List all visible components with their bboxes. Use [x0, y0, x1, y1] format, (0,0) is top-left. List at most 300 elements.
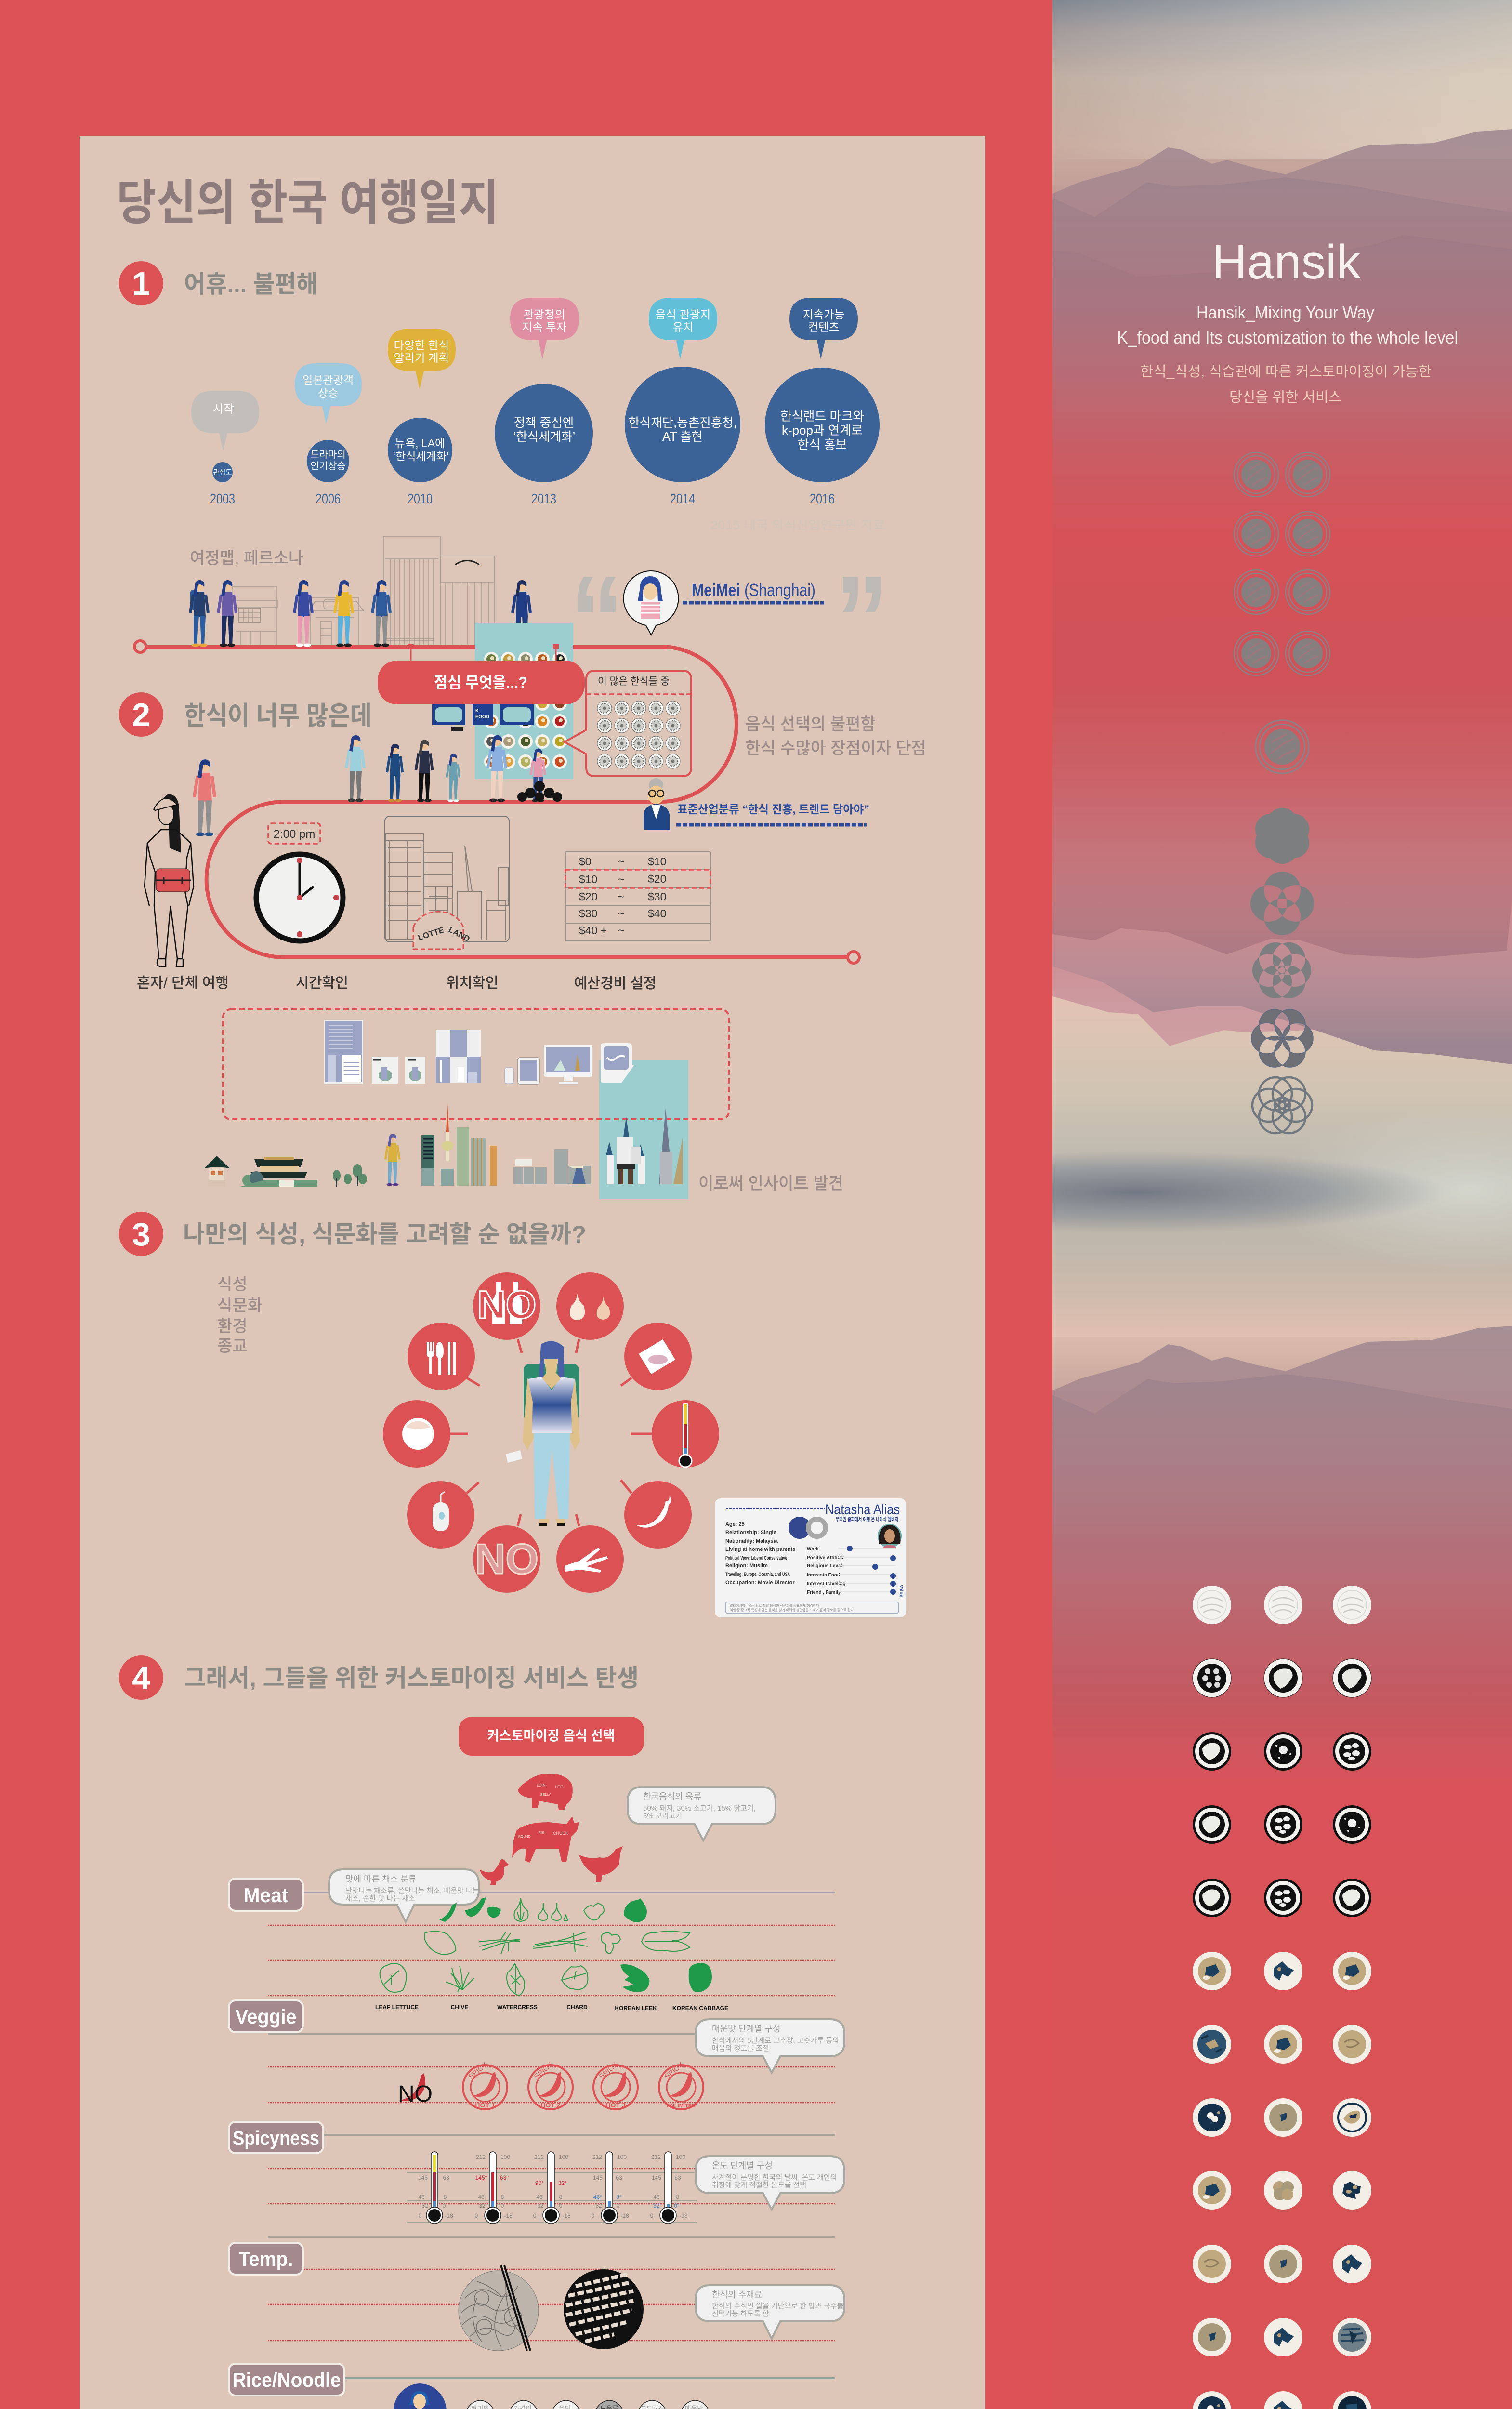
- panel: right mountain background: [1052, 0, 1512, 1764]
- thermometer 4: 100: [617, 2154, 627, 2160]
- speech bubble: sustainable content: [789, 298, 858, 359]
- thermometer 4: [592, 2152, 629, 2224]
- list: food habits factors: 종교: [217, 1337, 248, 1355]
- callout: Korean meat share: 50% 돼지, 30% 소고기, 15% 닭고기,: [643, 1804, 756, 1813]
- persona card: Natasha Alias: Nationality: Malaysia: [725, 1538, 778, 1544]
- stamp: hot 1: [463, 2061, 507, 2109]
- vegetable names: KOREAN CABBAGE: [672, 2005, 728, 2012]
- persona card: Natasha Alias: Natasha Alias: [825, 1502, 900, 1518]
- persona card: Natasha Alias: 여행 중 종교적 특성에 맞는 음식을 찾기 어려워 불편함을 느끼며 음식 정보를 필요로 한다: [730, 1608, 854, 1612]
- food kiosk screens: K: [475, 708, 479, 714]
- document 1: [324, 1020, 363, 1084]
- budget price table: $10: [648, 855, 666, 868]
- pattern: six petal flower: [1252, 942, 1311, 998]
- food dish grid on teal wall: [484, 652, 567, 769]
- list: food habits factors: [217, 1275, 263, 1355]
- persona sliders: [807, 1546, 904, 1598]
- thermometer 2: 0: [475, 2212, 478, 2219]
- circle labels: 한식재단,농촌진흥청,: [628, 416, 737, 430]
- year labels: [210, 491, 835, 507]
- plate grid: customizable dishes: [1193, 1586, 1371, 2409]
- option pins: [465, 2400, 710, 2409]
- connectors to lunch question: [408, 645, 558, 648]
- step labels: 시간확인: [296, 975, 348, 991]
- budget price table: ~: [618, 907, 624, 920]
- callout: main ingredients: 선택가능 하도록 함: [712, 2310, 769, 2318]
- circle labels: 인기상승: [310, 461, 346, 472]
- dashed row lines: spicy rows: [268, 2067, 835, 2103]
- lunch question pill: [378, 661, 585, 704]
- persona card: Natasha Alias: Age: 25: [725, 1522, 745, 1527]
- circle labels: 정책 중심엔: [514, 416, 574, 430]
- bubble text: start: 시작: [213, 403, 234, 416]
- clock: 2:00 pm: [256, 823, 343, 941]
- callout: vegetables by taste: 채소, 순한 맛 나는 채소: [345, 1894, 415, 1903]
- thermometer 2: 0: [501, 2202, 504, 2209]
- thermometer 5: 100: [676, 2154, 685, 2160]
- thermometer 3: 46: [536, 2194, 543, 2200]
- thermometer 2: 100: [500, 2154, 510, 2160]
- thermometer 5: 0: [650, 2212, 654, 2219]
- stamp: unlimited: [659, 2061, 703, 2109]
- thermometer 4: 32: [595, 2202, 602, 2209]
- bubble text: food attractions: 유치: [672, 321, 694, 333]
- speech bubble: plans: [388, 329, 456, 389]
- circle labels: ‘한식세계화’: [513, 430, 575, 444]
- icon: no alcohol: [473, 1272, 540, 1340]
- section 3 heading: [119, 1212, 586, 1256]
- traveller with bag: [385, 1134, 399, 1186]
- thermometer 4: 0: [592, 2212, 595, 2219]
- circle labels: 뉴욕, LA에: [395, 437, 445, 450]
- circle labels: k-pop과 연계로: [782, 423, 863, 437]
- section 4 heading: [119, 1655, 639, 1700]
- right panel subtitle: [1117, 303, 1458, 347]
- stamp: hot 1: SPICY: [467, 2061, 489, 2081]
- callout: temperature levels: [696, 2156, 844, 2210]
- year labels: 2013: [531, 491, 556, 507]
- persona photo: [878, 1524, 902, 1548]
- budget price table: $20: [579, 890, 597, 903]
- budget price table: ~: [618, 890, 624, 903]
- section 4 heading: 그래서, 그들을 위한 커스토마이징 서비스 탄생: [184, 1665, 639, 1692]
- bubble text: food attractions: 음식 관광지: [656, 308, 710, 321]
- circle labels: 드라마의: [310, 449, 346, 460]
- insight text: 이로써 인사이트 발견: [698, 1174, 843, 1193]
- icon: no meat: NO: [475, 1535, 539, 1583]
- callout: temperature levels: 취향에 맞게 적절한 온도를 선택: [712, 2181, 806, 2189]
- figure: running traveller: [194, 759, 215, 836]
- palace: [240, 1157, 317, 1187]
- speech bubble: Japanese tourists: [295, 363, 362, 424]
- icon: pile of black food balls: [517, 781, 562, 802]
- connector stems: [411, 647, 556, 661]
- stamp: unlimited: UNLIMITED: [667, 2103, 696, 2109]
- pattern: four petal flower: [1250, 872, 1314, 935]
- row label: Temp: [229, 2243, 835, 2341]
- persona: MeiMei: “: [570, 550, 624, 690]
- teal food wall: [475, 623, 573, 779]
- persona sliders: Positive Attitude: [807, 1555, 845, 1561]
- bubble text: Japanese tourists: 일본관광객: [302, 374, 354, 386]
- thermometers chart: [407, 2152, 697, 2224]
- right panel Korean subtitle: [1140, 364, 1432, 405]
- callout: main ingredients: [696, 2285, 844, 2339]
- dish grid in callout: [597, 701, 680, 768]
- section 3 heading: 나만의 식성, 식문화를 고려할 순 없을까?: [183, 1221, 586, 1248]
- callout: Korean meat share: [628, 1787, 776, 1840]
- thermometer 3: 0: [533, 2212, 537, 2219]
- stamp: hot 3: HOT 3: [605, 2101, 626, 2109]
- callout: spiciness levels: 한식에서의 5단계로 고추장, 고춧가루 등의: [712, 2037, 839, 2045]
- panel: main beige content panel: [80, 136, 985, 2409]
- pin: brown rice: [465, 2400, 495, 2409]
- icon: cow: ROUND: [518, 1835, 531, 1839]
- document 2 and 3: [372, 1057, 425, 1084]
- callout: spiciness levels: 매움의 정도를 조절: [712, 2044, 769, 2052]
- thermometer 2: -18: [504, 2212, 513, 2219]
- speech bubble: start: [191, 391, 259, 451]
- thermometer 5: 32°: [653, 2202, 662, 2209]
- thermometer 5: -18: [679, 2212, 688, 2219]
- icon: cutlery: [408, 1323, 475, 1390]
- thermometer 4: 46°: [593, 2194, 602, 2200]
- figure: expert elder: [644, 778, 670, 830]
- location map: city box: [385, 816, 509, 949]
- thermometer 1: 0: [419, 2212, 422, 2219]
- devices: [505, 1043, 634, 1084]
- row label and line: Rice/Noodle: Rice/Noodle: [232, 2369, 341, 2391]
- budget price table: [565, 852, 710, 941]
- callout: main ingredients: 한식의 주재료: [712, 2290, 762, 2300]
- persona card: Natasha Alias: 무역권 종파에서 여행 온 나와식 엠비자: [836, 1516, 898, 1522]
- illustration: background street buildings: [231, 536, 494, 647]
- persona card: Natasha Alias: Religion: Muslim: [725, 1563, 768, 1569]
- bubble text: Japanese tourists: 상승: [318, 387, 338, 399]
- bubble text: tourism investment: 지속 투자: [522, 321, 567, 333]
- callout: many hansik dishes panel: 이 많은 한식들 중: [598, 676, 670, 687]
- year labels: 2010: [408, 491, 433, 507]
- thermometer 3: [533, 2152, 571, 2224]
- diagram: food preference wheel: [383, 1272, 719, 1593]
- icon: rice bowl pattern: [564, 2269, 644, 2349]
- icon: no alcohol: NO: [477, 1283, 537, 1327]
- travellers on lower path: [346, 735, 545, 802]
- journey map label: 여정맵, 페르소나: [190, 549, 303, 568]
- animal meat cuts: [480, 1774, 623, 1885]
- timeline chart: hansik growth by year: [191, 298, 885, 532]
- persona sliders: Friend , Family: [807, 1590, 841, 1595]
- year labels: 2003: [210, 491, 235, 507]
- thermometer 3: 32°: [558, 2180, 567, 2186]
- row label and line: Meat: [229, 1879, 835, 1911]
- pattern: outlined rosette: [1251, 1009, 1313, 1067]
- document 4: [436, 1030, 481, 1083]
- budget price table: $30: [648, 890, 666, 903]
- circle labels: 한식랜드 마크와: [780, 409, 864, 424]
- thermometer 5: [650, 2152, 688, 2224]
- year labels: 2006: [316, 491, 341, 507]
- dashed row lines: vegetable rows: [268, 1925, 835, 1996]
- stamp: hot 2: SPICY: [533, 2061, 554, 2081]
- thermometer 3: -18: [562, 2212, 571, 2219]
- thermometer 1: -18: [445, 2212, 453, 2219]
- pagoda: [204, 1156, 230, 1187]
- vegetables row 2: [425, 1931, 690, 1954]
- thermometer 2: 212: [476, 2154, 486, 2160]
- circle labels: 관심도: [213, 468, 232, 476]
- stamp: hot 3: [593, 2061, 638, 2109]
- callout: Korean meat share: 5% 오리고기: [643, 1812, 682, 1820]
- circles by year: [212, 367, 880, 482]
- icon: garlic and onion: [556, 1272, 624, 1340]
- icon: pig: LEG: [555, 1785, 564, 1789]
- row label and line: Rice/Noodle: [229, 2364, 835, 2396]
- travellers on upper path: [190, 580, 530, 647]
- row label and line: Veggie: [229, 2000, 835, 2034]
- text: food choice inconvenience: [745, 715, 926, 758]
- year labels: 2014: [670, 491, 695, 507]
- location map: city box: LOTTE: [417, 926, 445, 942]
- circle labels: [213, 409, 864, 476]
- food kiosk screens: FOOD: [475, 715, 489, 720]
- stamp: hot 1: HOT 1: [475, 2101, 495, 2109]
- row label and line: Spicyness: [229, 2122, 835, 2153]
- thermometer 1: 145: [418, 2174, 428, 2181]
- thermometer 4: 63: [616, 2174, 622, 2181]
- icon: rice bowl: [383, 1400, 450, 1468]
- callout: temperature levels: 온도 단계별 구성: [712, 2161, 773, 2171]
- icon: pig: BELLY: [540, 1793, 551, 1797]
- section 4 heading: 4: [132, 1660, 150, 1696]
- clock: 2:00 pm: 2:00 pm: [274, 828, 315, 841]
- customized food selection pill: 커스토마이징 음식 선택: [487, 1728, 615, 1743]
- location map: city box: LAND: [447, 925, 472, 944]
- list: food habits factors: 식문화: [217, 1297, 263, 1315]
- thermometer 4: -18: [620, 2212, 629, 2219]
- icon: cow: RIB: [539, 1831, 544, 1835]
- callout: vegetables by taste: [329, 1869, 479, 1922]
- callout: temperature levels: 사계절이 분명한 한국의 날씨, 온도 개인의: [712, 2173, 837, 2182]
- stamp: unlimited: SPICY: [663, 2061, 685, 2081]
- vegetable names: WATERCRESS: [497, 2004, 538, 2011]
- thermometer 3: 8: [559, 2194, 563, 2200]
- lunch question pill: 점심 무엇을...?: [434, 674, 527, 691]
- single medallion: [1256, 720, 1309, 773]
- text: food choice inconvenience: 한식 수많아 장점이자 단점: [745, 739, 926, 758]
- budget price table: ~: [618, 855, 624, 868]
- icon: pig: LOIN: [537, 1783, 546, 1787]
- expert quote: 표준산업분류 “한식 진흥, 트렌드 담아야”: [677, 803, 869, 816]
- icon: noodle bowl: [459, 2265, 539, 2351]
- pattern: solid scallop flower: [1255, 808, 1309, 864]
- user avatar pin: [394, 2383, 447, 2409]
- step labels: 혼자/ 단체 여행: [137, 975, 229, 991]
- thermometer 1: [418, 2152, 453, 2224]
- vegetables row 3: [380, 1963, 712, 1996]
- gray food medallions: [1234, 452, 1330, 675]
- year labels: 2016: [810, 491, 835, 507]
- bubble text: sustainable content: 컨텐츠: [808, 321, 839, 333]
- journey end dot: [848, 952, 859, 963]
- thermometer 5: 8: [676, 2194, 680, 2200]
- persona sliders: Value: [898, 1585, 904, 1598]
- thermometer 4: 0: [617, 2202, 620, 2209]
- N Seoul tower and towers: [421, 1103, 497, 1186]
- row label and line: Spicyness: Spicyness: [233, 2127, 319, 2149]
- persona card: Natasha Alias: Relationship: Single: [725, 1530, 776, 1535]
- section 3 heading: 3: [132, 1216, 150, 1253]
- icon: packed box: [624, 1323, 692, 1390]
- thermometer 1: 63: [443, 2174, 449, 2181]
- thermometer 2: [475, 2152, 513, 2224]
- pin: all vegetables: [637, 2400, 667, 2409]
- persona sliders: Interests Food: [807, 1573, 840, 1578]
- list: food habits factors: 식성: [217, 1275, 248, 1294]
- wheel tails: [450, 1339, 652, 1526]
- dashed row lines: temperature rows: [268, 2169, 835, 2204]
- thermometer 3: 90°: [535, 2180, 544, 2186]
- customized food selection pill: [459, 1717, 644, 1756]
- callout: Korean meat share: 한국음식의 육류: [643, 1792, 701, 1801]
- row label: Temp: Temp.: [239, 2248, 293, 2270]
- step labels: 위치확인: [446, 975, 499, 991]
- thermometer 3: 100: [559, 2154, 568, 2160]
- vegetable names: CHARD: [566, 2004, 588, 2011]
- circle labels: AT 출현: [662, 430, 703, 444]
- icon: cow: CHUCK: [553, 1831, 568, 1836]
- stamp: hot 2: [528, 2061, 573, 2109]
- pin: white rice: [551, 2400, 581, 2409]
- figure: woman at centre: [506, 1341, 580, 1526]
- icon: pig: [518, 1774, 573, 1810]
- section 2 heading: 한식이 너무 많은데: [184, 702, 372, 730]
- budget price table: ~: [618, 924, 624, 937]
- thermometer 1: 8: [444, 2194, 447, 2200]
- thermometer 2: 46: [478, 2194, 485, 2200]
- vegetables row 1: [439, 1897, 647, 1922]
- circle labels: 한식 홍보: [798, 437, 847, 452]
- text: food choice inconvenience: 음식 선택의 불편함: [745, 715, 876, 734]
- persona card: Natasha Alias: [715, 1498, 906, 1617]
- thermometer 5: 145: [652, 2174, 661, 2181]
- source note: 2015 내국 외식산업연구원 자료: [710, 519, 885, 532]
- callout: spiciness levels: 매운맛 단계별 구성: [712, 2024, 780, 2034]
- title: 당신의 한국 여행일지: [117, 176, 499, 230]
- persona card: Natasha Alias: 말레이시아 무슬림으로 할랄 음식과 식문화를 중요하게 생각한다: [730, 1603, 819, 1608]
- right panel Korean subtitle: 한식_식성, 식습관에 따른 커스토마이징이 가능한: [1140, 364, 1432, 380]
- stamp: hot 3: SPICY: [598, 2061, 619, 2081]
- right panel subtitle: Hansik_Mixing Your Way: [1196, 303, 1374, 322]
- callout: spiciness levels: [696, 2019, 844, 2073]
- row label and line: Veggie: Veggie: [235, 2005, 297, 2028]
- persona card: Natasha Alias: Living at home with parents: [725, 1547, 795, 1552]
- NO spicy icon: NO: [398, 2081, 433, 2107]
- thermometer 5: 46: [653, 2194, 660, 2200]
- step labels: [137, 975, 657, 992]
- persona sliders: Interest traveling: [807, 1581, 846, 1587]
- thermometer 2: 8: [501, 2194, 504, 2200]
- persona card: Natasha Alias: Political View: Liberal Conservative: [725, 1555, 787, 1561]
- thermometer 4: 8°: [616, 2194, 622, 2200]
- Lotte castle and tower: [606, 1108, 683, 1184]
- pin: option 2: [509, 2400, 539, 2409]
- research documents and devices box: [223, 1009, 729, 1119]
- section 1 heading: 1: [132, 265, 150, 302]
- budget price table: ~: [618, 873, 624, 886]
- thermometer 2: 145°: [475, 2174, 487, 2181]
- step labels: 예산경비 설정: [574, 976, 657, 992]
- bubble text: plans: 다양한 한식: [394, 339, 449, 352]
- icon: drink: [407, 1481, 474, 1549]
- bubble text: tourism investment: 관광청의: [524, 308, 565, 321]
- thermometer 5: 212: [651, 2154, 661, 2160]
- persona card: Natasha Alias: Occupation: Movie Director: [725, 1580, 795, 1586]
- budget price table: $30: [579, 907, 597, 920]
- Seoul skyline illustration: [204, 1103, 683, 1187]
- bubble text: plans: 알리기 계획: [394, 352, 449, 364]
- budget price table: $0: [579, 855, 592, 868]
- icon: no meat: [473, 1525, 540, 1593]
- vegetable names: KOREAN LEEK: [615, 2005, 657, 2012]
- vegetable names: [375, 2004, 728, 2012]
- thermometer 2: 63°: [500, 2174, 509, 2181]
- persona: MeiMei: MeiMei (Shanghai): [692, 580, 815, 600]
- icon: chili: [624, 1481, 692, 1549]
- icon: scallion: [556, 1525, 624, 1593]
- thermometer 4: 212: [592, 2154, 602, 2160]
- food kiosk screens: [432, 704, 534, 731]
- thermometer 5: 0°: [674, 2202, 680, 2209]
- persona: MeiMei: ”: [835, 550, 889, 690]
- figure: outline woman with red belt bag: [145, 794, 194, 966]
- callout: many hansik dishes panel: [565, 671, 691, 776]
- journey start dot: [134, 641, 146, 652]
- teal insight column: [599, 1060, 688, 1199]
- bubble text: sustainable content: 지속가능: [803, 308, 844, 321]
- right panel title: Hansik: Hansik: [1212, 235, 1361, 289]
- thermometer 3: 212: [534, 2154, 544, 2160]
- right panel subtitle: K_food and Its customization to the whole level: [1117, 328, 1458, 347]
- callout: main ingredients: 한식의 주식인 쌀을 기반으로 한 밥과 국수를: [712, 2302, 844, 2310]
- section 2 heading: [119, 692, 372, 737]
- persona sliders: Work: [807, 1547, 819, 1552]
- right panel Korean subtitle: 당신을 위한 서비스: [1229, 389, 1341, 405]
- icon: cow: [512, 1816, 579, 1863]
- persona: MeiMei: [570, 550, 889, 690]
- budget price table: $40: [648, 907, 666, 920]
- budget price table: $10: [579, 873, 597, 886]
- budget price table: $20: [648, 873, 666, 885]
- divider above Temp: [268, 2236, 835, 2238]
- persona sliders: Religious Level: [807, 1563, 842, 1569]
- thermometer 3: 32: [537, 2202, 544, 2209]
- journey line: [146, 647, 848, 957]
- budget price table: $40 +: [579, 924, 607, 937]
- persona card: Natasha Alias: Traveling: Europe, Oceania, and USA: [725, 1572, 790, 1577]
- speech bubble: food attractions: [649, 298, 717, 359]
- row label and line: Meat: Meat: [244, 1884, 288, 1906]
- vegetable names: CHIVE: [451, 2004, 468, 2011]
- vegetable names: LEAF LETTUCE: [375, 2004, 419, 2011]
- pin: selected: [594, 2400, 624, 2409]
- thermometer 1: 0: [443, 2202, 446, 2209]
- section 1 heading: 어휴... 불편해: [184, 271, 318, 298]
- section 2 heading: 2: [132, 697, 150, 733]
- stamp: hot 2: HOT 2: [540, 2101, 561, 2109]
- pin: spicy: [680, 2400, 710, 2409]
- section 1 heading: [119, 261, 318, 305]
